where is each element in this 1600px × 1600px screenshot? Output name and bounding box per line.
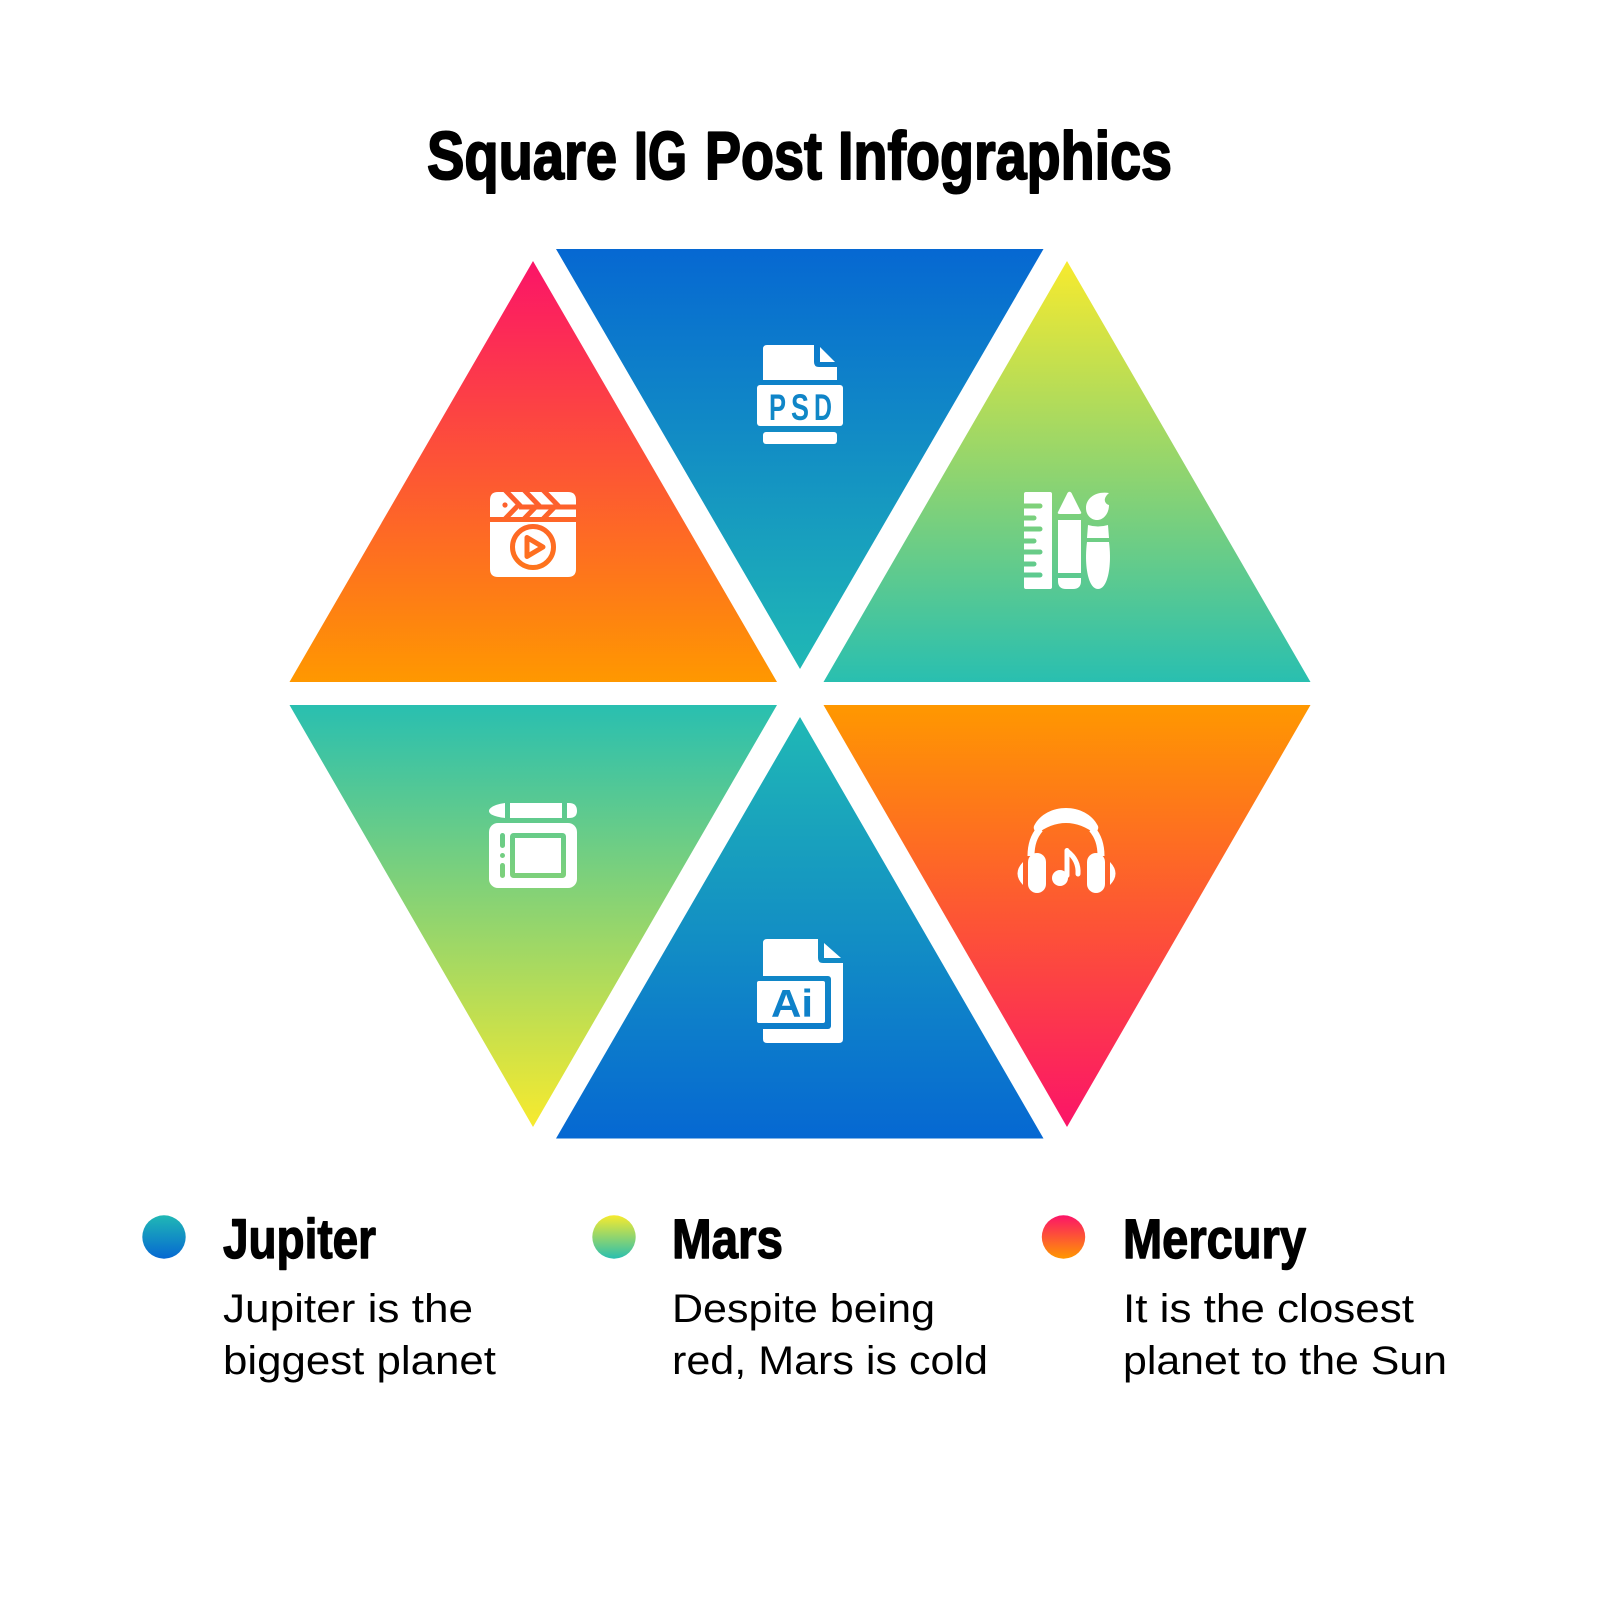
icon: PSD file: S	[791, 387, 809, 428]
panel: lower left green-yellow triangle with drawing tablet icon	[290, 705, 777, 1127]
title: Square	[427, 118, 617, 194]
icon: Ai file: Ai	[771, 983, 813, 1026]
text block: Mercury description: It is the closest	[1123, 1287, 1414, 1331]
icon: Jupiter gradient dot	[142, 1215, 186, 1259]
title: Post	[705, 118, 822, 194]
legend item: Mars	[592, 1207, 988, 1383]
panel: hexagon of triangles	[290, 249, 1310, 1138]
text block: Mercury description	[1123, 1287, 1447, 1383]
panel: bottom blue triangle with Ai icon	[556, 717, 1044, 1138]
text block: Jupiter description	[223, 1287, 496, 1383]
legend item: Jupiter	[142, 1207, 496, 1383]
panel: lower right orange-pink triangle with headphones icon	[824, 705, 1310, 1127]
heading: Mars: Mars	[672, 1207, 783, 1270]
heading: Jupiter: Jupiter	[223, 1207, 376, 1270]
icon: ruler, pencil and brush	[1022, 492, 1110, 589]
text block: Jupiter description: Jupiter is the	[223, 1287, 473, 1331]
icon: video clapperboard	[490, 490, 578, 577]
icon: Ai file	[757, 939, 843, 1043]
icon: headphones with music note	[1018, 808, 1116, 893]
icon: graphics tablet and pen	[489, 803, 577, 888]
text block: Mars description: red, Mars is cold	[672, 1339, 988, 1383]
icon: Mercury gradient dot	[1042, 1215, 1085, 1259]
title: IG	[634, 118, 687, 194]
icon: PSD file	[757, 345, 843, 444]
panel: top blue triangle with PSD icon	[556, 249, 1044, 669]
icon: PSD file: D	[814, 387, 832, 428]
text block: Mars description	[672, 1287, 988, 1383]
icon: Mars gradient dot	[592, 1215, 636, 1259]
title: Infographics	[838, 118, 1172, 194]
text block: Jupiter description: biggest planet	[223, 1339, 496, 1383]
panel: upper right yellow-green triangle with art tools icon	[824, 261, 1310, 682]
text block: Mars description: Despite being	[672, 1287, 935, 1331]
legend item: Mercury	[1042, 1207, 1447, 1383]
text block: Mercury description: planet to the Sun	[1123, 1339, 1447, 1383]
title	[427, 118, 1172, 194]
heading: Mercury: Mercury	[1123, 1207, 1306, 1270]
icon: PSD file: P	[769, 387, 786, 428]
panel: upper left red-orange triangle with clapperboard icon	[290, 261, 777, 682]
